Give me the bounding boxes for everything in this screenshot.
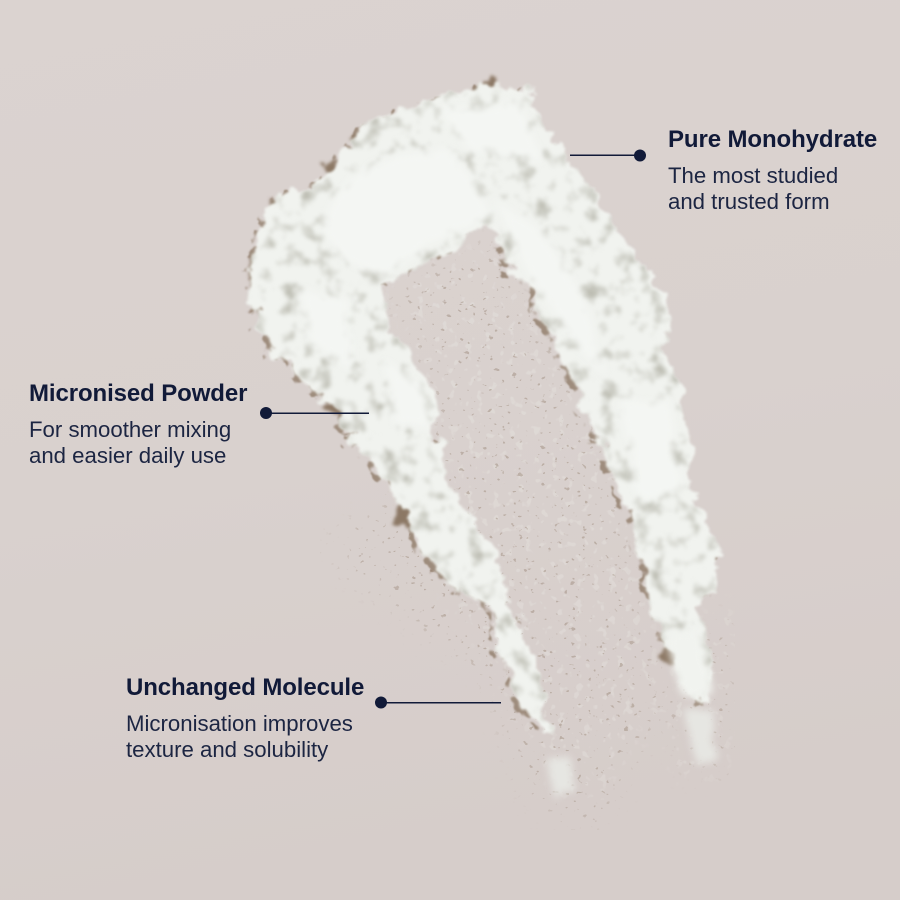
callout: pure monohydrate: and trusted form — [668, 189, 830, 214]
callout: pure monohydrate — [668, 126, 877, 214]
callout: micronised powder: Micronised Powder — [29, 380, 247, 407]
callout: micronised powder: and easier daily use — [29, 443, 226, 468]
callout: pure monohydrate: Pure Monohydrate — [668, 126, 877, 153]
callout: unchanged molecule: Micronisation improves — [126, 711, 353, 736]
callout: unchanged molecule — [126, 674, 364, 762]
callout: micronised powder: For smoother mixing — [29, 417, 231, 442]
callout: pure monohydrate: The most studied — [668, 163, 838, 188]
scattered white powder — [385, 240, 735, 800]
powder contact shadow — [242, 83, 712, 738]
powder main body — [248, 80, 718, 735]
callout: unchanged molecule: texture and solubility — [126, 737, 328, 762]
large shadow patches — [246, 76, 684, 668]
callout: micronised powder — [29, 380, 248, 468]
scattered brown flecks — [320, 240, 735, 830]
smooth pressed patches — [300, 100, 680, 500]
callout: unchanged molecule: Unchanged Molecule — [126, 674, 364, 701]
lower crumbs — [546, 630, 716, 800]
